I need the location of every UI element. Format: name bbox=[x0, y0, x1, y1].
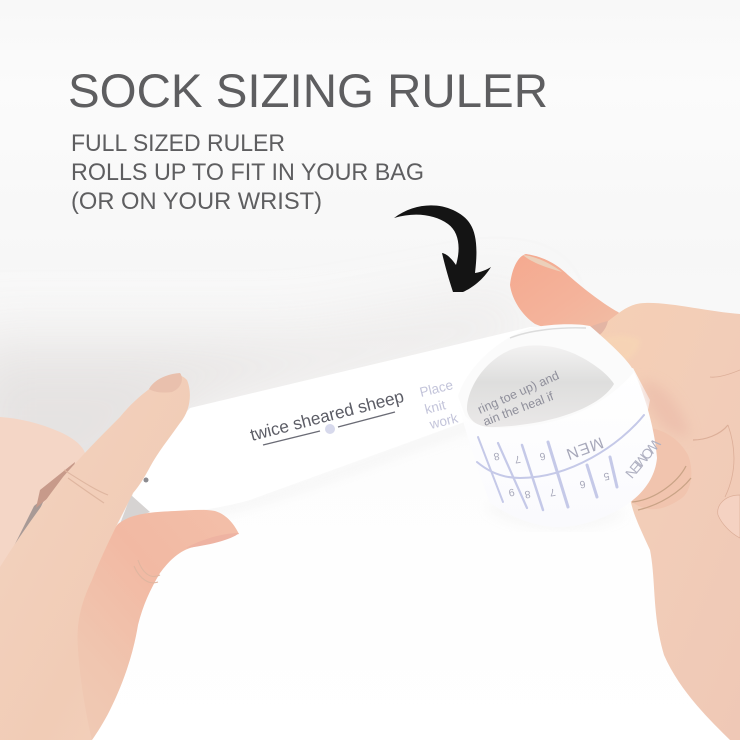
roll rim line bbox=[510, 328, 586, 338]
inner back wall bbox=[458, 324, 650, 470]
rolled ruler bbox=[458, 324, 664, 527]
subtitle text: ROLLS UP TO FIT IN YOUR BAG bbox=[71, 159, 424, 186]
rivet bbox=[144, 478, 148, 482]
soft shadow behind ruler bbox=[0, 300, 530, 510]
ruler labels: 6 bbox=[578, 478, 586, 490]
arrow bbox=[394, 205, 491, 292]
palm pink shading bbox=[640, 380, 690, 436]
gap shadow bbox=[14, 496, 46, 546]
ruler markings bbox=[477, 415, 644, 510]
ruler labels: 9 bbox=[507, 486, 515, 498]
inner printed text: ring toe up) and bbox=[476, 368, 561, 417]
ruler labels: 5 bbox=[602, 470, 610, 482]
ruler labels: 8 bbox=[492, 450, 500, 462]
thumb nail edge bbox=[523, 255, 562, 272]
back of hand and middle finger bbox=[0, 417, 86, 570]
ruler instructions text: knit bbox=[423, 397, 447, 417]
inner printed text: ain the heal if bbox=[481, 389, 556, 429]
subtitle text: (OR ON YOUR WRIST) bbox=[71, 188, 322, 215]
thumb bbox=[510, 254, 640, 345]
left index nail bbox=[149, 373, 182, 393]
ruler labels: MEN bbox=[564, 433, 605, 462]
index nail bbox=[561, 321, 608, 345]
ruler strip bbox=[132, 325, 590, 514]
knuckle creases bbox=[64, 470, 160, 583]
ruler labels: 6 bbox=[538, 450, 546, 462]
ruler instructions text bbox=[418, 377, 460, 432]
ruler instructions text: Place bbox=[418, 377, 455, 400]
thumb nail bbox=[186, 533, 239, 548]
right edge finger bbox=[718, 495, 740, 538]
ruler labels: WOMEN bbox=[622, 436, 664, 482]
ruler labels: 7 bbox=[548, 486, 556, 498]
hand silhouette with index finger bbox=[562, 303, 740, 740]
index finger and palm bbox=[0, 375, 190, 740]
grey gap between finger and thumb bbox=[120, 495, 150, 524]
ruler instructions text: work bbox=[427, 410, 460, 432]
subtitle text bbox=[71, 130, 424, 215]
shadow beneath ruler strip bbox=[150, 425, 470, 516]
right lower finger bbox=[632, 428, 691, 509]
right hand bbox=[510, 254, 740, 740]
roll opening bbox=[467, 345, 614, 427]
ruler labels bbox=[492, 433, 664, 500]
roll outer band bbox=[458, 372, 657, 527]
ruler labels: 8 bbox=[523, 488, 531, 500]
brand logo: twice sheared sheep bbox=[248, 386, 406, 445]
ruler labels: 7 bbox=[513, 453, 521, 465]
finger tip warm shading bbox=[575, 336, 640, 368]
palm and thumb bbox=[40, 510, 239, 740]
left hand bbox=[0, 373, 239, 740]
subtitle text: FULL SIZED RULER bbox=[71, 130, 285, 157]
title: SOCK SIZING RULER bbox=[68, 64, 548, 117]
hand fold lines bbox=[693, 370, 740, 497]
finger creases bbox=[632, 466, 691, 510]
roll drop shadow bbox=[490, 505, 620, 524]
